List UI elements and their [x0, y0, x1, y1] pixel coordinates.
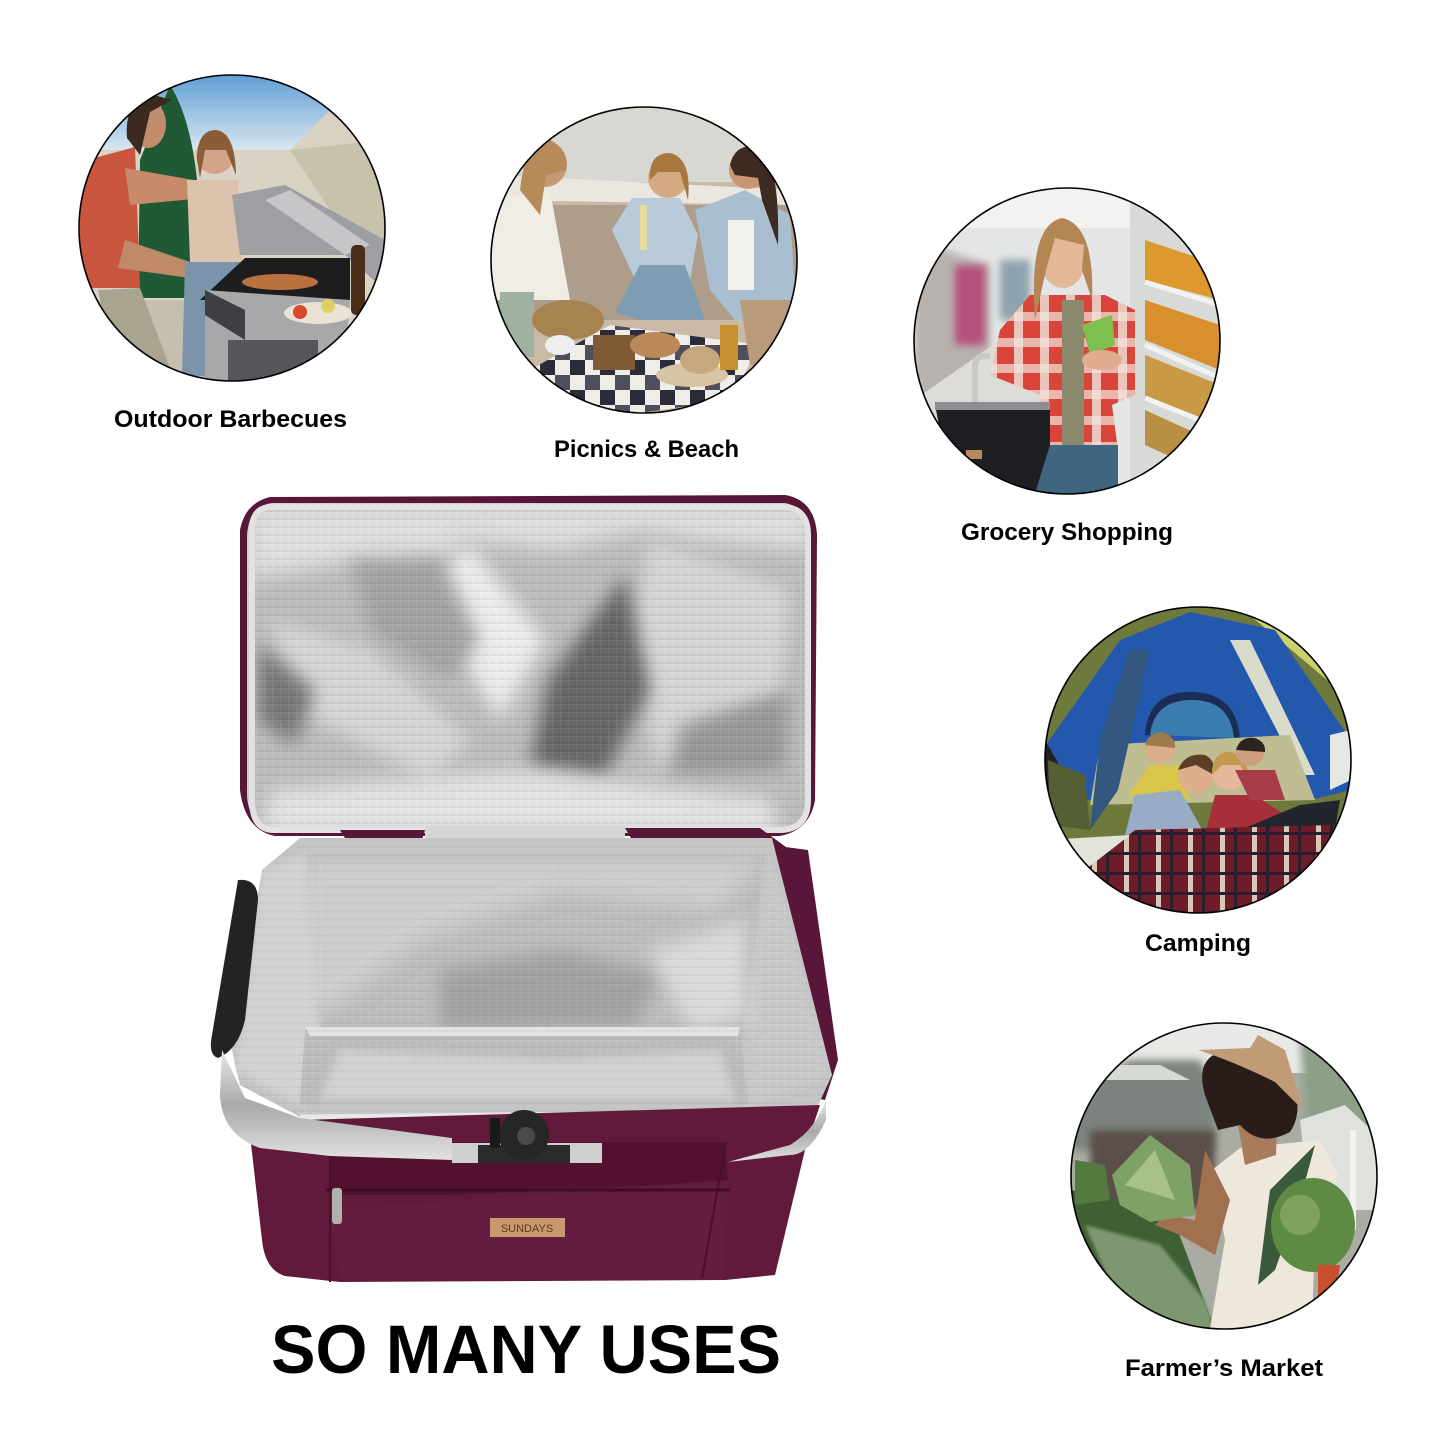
picnic items — [500, 292, 534, 357]
shopper — [990, 295, 1135, 450]
right woman — [695, 190, 797, 320]
tent — [1048, 612, 1351, 800]
woman — [1210, 1140, 1338, 1329]
centre woman — [612, 198, 698, 280]
grill — [232, 185, 385, 290]
woman — [187, 180, 242, 262]
photo circle: outdoor barbecues — [79, 75, 385, 381]
bag clasp — [499, 1110, 549, 1160]
family — [1145, 738, 1175, 763]
photo circle: grocery shopping — [914, 188, 1220, 494]
bag rim — [220, 1050, 452, 1160]
man — [80, 147, 140, 288]
blanket — [1085, 825, 1335, 913]
label: outdoor barbecues: Outdoor Barbecues — [114, 406, 347, 433]
basket — [975, 356, 990, 405]
bag brand tag: SUNDAYS — [501, 1223, 553, 1235]
label: camping: Camping — [1145, 930, 1251, 957]
product: open cooler bag — [211, 495, 838, 1282]
bag front body — [250, 1105, 820, 1282]
photo circle: picnics and beach — [490, 107, 797, 413]
left woman — [492, 200, 570, 300]
bag body back wall — [770, 845, 838, 1100]
bag hinge — [340, 830, 425, 846]
bag brand tag — [490, 1218, 565, 1237]
bag lid — [240, 495, 817, 836]
bag interior — [232, 838, 832, 1118]
label: grocery shopping: Grocery Shopping — [961, 519, 1173, 546]
main heading: SO MANY USES — [271, 1311, 781, 1388]
bag side handle — [211, 880, 258, 1058]
photo circle: farmer's market — [1071, 1023, 1377, 1329]
greens — [1071, 1190, 1215, 1329]
photo circle: camping — [1045, 607, 1351, 913]
label: farmer's market: Farmer’s Market — [1125, 1355, 1323, 1382]
label: picnics and beach: Picnics & Beach — [554, 436, 739, 463]
